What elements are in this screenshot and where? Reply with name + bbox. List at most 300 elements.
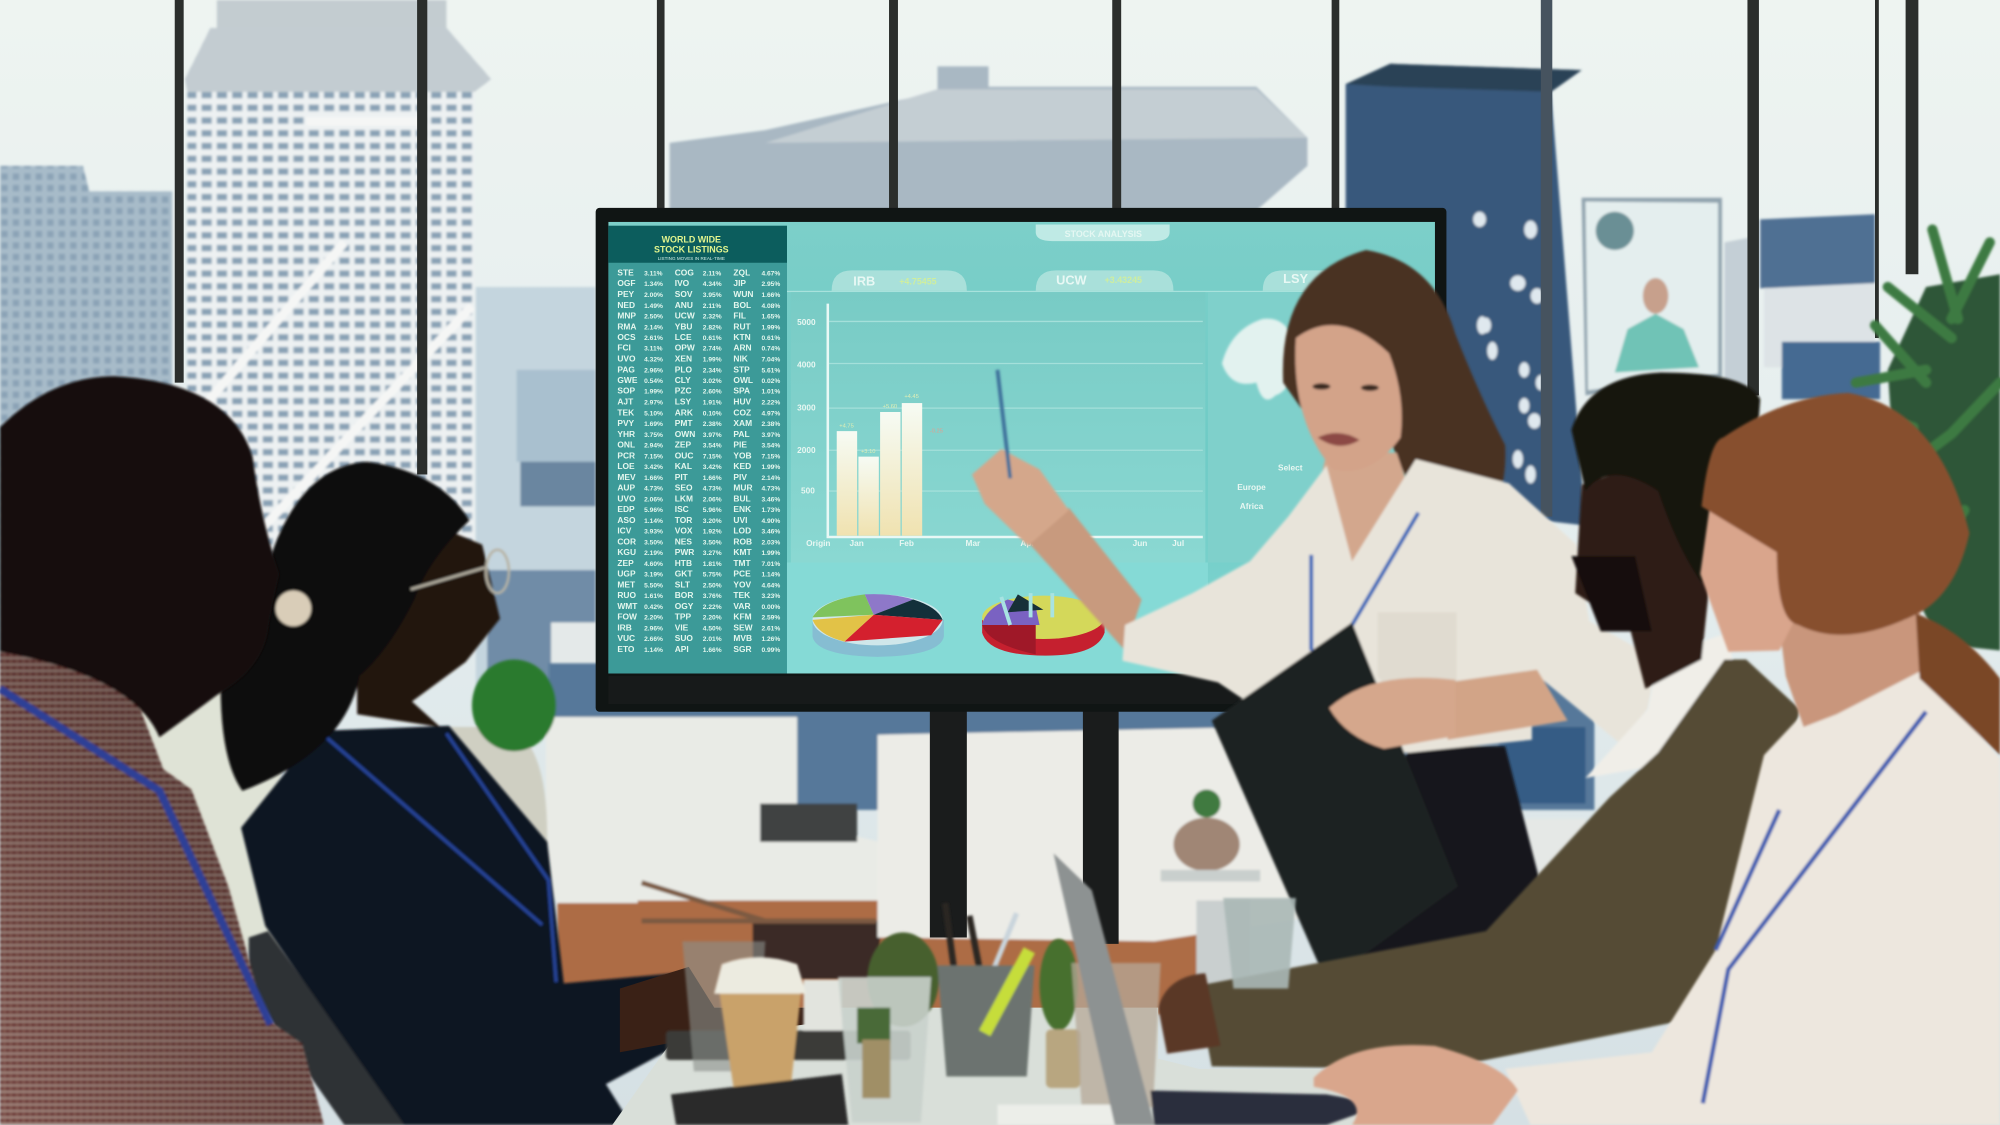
table rows: 2.38% [703, 421, 722, 428]
table rows: ARK [675, 407, 693, 417]
stock table panel [608, 226, 787, 673]
table rows: OGF [617, 278, 636, 288]
ticker tab: IRB [832, 270, 967, 291]
man on left [0, 376, 324, 1125]
table rows: 1.65% [761, 313, 780, 320]
table rows: 2.22% [703, 604, 722, 611]
table rows: 5.75% [703, 572, 722, 579]
dark rug [753, 921, 880, 980]
blue building lower [1782, 342, 1880, 399]
table rows: UVI [733, 515, 747, 525]
world map [1222, 319, 1294, 400]
table subtitle: LISTING MOVES IN REAL-TIME [658, 256, 725, 261]
chart axes [828, 304, 1203, 537]
table rows: 2.96% [644, 367, 663, 374]
x-axis labels: Jan [849, 538, 864, 548]
table rows: 1.73% [761, 507, 780, 514]
x-axis labels: Jun [1133, 538, 1147, 548]
potted plant on side table [1161, 790, 1260, 990]
building right of tower [476, 287, 596, 708]
wall display [596, 208, 1446, 712]
wooden sofa table frame [642, 883, 876, 921]
table rows: 1.99% [703, 356, 722, 363]
table rows: LOE [617, 461, 635, 471]
table rows: 1.26% [761, 636, 780, 643]
table rows: ASO [617, 515, 636, 525]
presenter face [1295, 325, 1402, 471]
left low-rise building [0, 166, 172, 663]
presenter neck [1314, 453, 1416, 574]
table rows: ENK [733, 504, 751, 514]
table rows: 3.02% [703, 378, 722, 385]
table rows: UVO [617, 353, 636, 363]
table rows: 3.46% [761, 496, 780, 503]
table rows: 4.64% [761, 582, 780, 589]
table rows: 1.91% [703, 400, 722, 407]
presenter pointing forearm [1028, 508, 1142, 651]
plaid shirt [0, 652, 324, 1125]
table rows: LKM [675, 493, 693, 503]
table rows: FCI [617, 343, 631, 353]
table rows: 3.23% [761, 593, 780, 600]
table rows: LOD [733, 526, 751, 536]
map panel: Africa [1240, 501, 1264, 511]
table rows: 3.42% [703, 464, 722, 471]
white sofa right [878, 727, 1301, 941]
central roof band [765, 89, 1307, 143]
table rows: 1.66% [644, 475, 663, 482]
table rows: RMA [617, 321, 637, 331]
table rows: ONL [617, 440, 635, 450]
table rows: VUC [617, 633, 635, 643]
table rows: 2.61% [761, 625, 780, 632]
top tab: stock analysis: STOCK ANALYSIS [1065, 229, 1142, 239]
table rows: 1.01% [761, 389, 780, 396]
table rows: YHR [617, 429, 635, 439]
navy top [241, 726, 689, 1125]
table rows: SEW [733, 622, 753, 632]
table rows: OUC [675, 450, 693, 460]
table rows: 2.14% [644, 324, 663, 331]
table rows: AUP [617, 483, 635, 493]
hair flower [276, 591, 311, 626]
pie chart one [812, 594, 944, 657]
table rows: SOP [617, 386, 635, 396]
map panel: Select [1278, 463, 1303, 473]
bezel lower brand strip [608, 676, 1435, 704]
table rows: 4.97% [761, 410, 780, 417]
billboard [1582, 198, 1722, 395]
table rows: FOW [617, 612, 637, 622]
left white tower [185, 0, 491, 561]
table rows: 3.50% [703, 539, 722, 546]
small plant left [867, 932, 939, 1027]
table rows: 2.34% [703, 367, 722, 374]
blue lanyard [0, 689, 270, 1024]
table rows: 2.01% [703, 636, 722, 643]
table rows: RUT [733, 321, 752, 331]
table rows: 1.99% [761, 464, 780, 471]
plant leaves [1849, 230, 2000, 574]
table rows: PIE [733, 440, 747, 450]
table rows: SLT [675, 579, 691, 589]
table rows: 2.32% [703, 313, 722, 320]
table rows: SEO [675, 483, 693, 493]
coffee cup [714, 957, 806, 1087]
table title line two: STOCK LISTINGS [654, 245, 729, 255]
table rows: ZQL [733, 268, 750, 278]
table rows: 2.06% [644, 496, 663, 503]
ticker tab: LSY: LSY [1283, 271, 1308, 286]
screen background [608, 222, 1435, 673]
ticker tab: IRB: IRB [853, 274, 875, 289]
white cabinet [1524, 819, 1585, 875]
white sofa left [546, 717, 880, 903]
table rows: 3.11% [644, 346, 663, 353]
table rows: 3.76% [703, 593, 722, 600]
table rows: OPW [675, 343, 695, 353]
table rows: 5.61% [761, 367, 780, 374]
table rows: 2.74% [703, 346, 722, 353]
green shrub [472, 659, 556, 751]
table rows: 4.34% [703, 281, 722, 288]
table rows: 7.01% [761, 561, 780, 568]
table rows: KTN [733, 332, 751, 342]
table rows: 3.54% [761, 443, 780, 450]
table rows: FIL [733, 310, 746, 320]
table rows: 0.74% [761, 346, 780, 353]
table rows: 5.96% [703, 507, 722, 514]
table rows: 2.66% [644, 636, 663, 643]
pie panel band [787, 562, 1208, 673]
presenter white shirt [1122, 459, 1657, 755]
right dark tower [1346, 64, 1585, 526]
bar value labels: +4.45 [904, 394, 919, 400]
table rows: LSY [675, 397, 691, 407]
table rows: KFM [733, 612, 752, 622]
table rows: 1.61% [644, 593, 663, 600]
table rows: 3.97% [761, 432, 780, 439]
presenter skirt [1327, 746, 1540, 995]
water glass left [682, 941, 765, 1071]
table rows: 3.93% [644, 529, 663, 536]
table rows [617, 268, 780, 654]
table rows: UGP [617, 569, 636, 579]
chart gridlines [829, 321, 1203, 491]
table rows: JIP [733, 278, 746, 288]
her auburn hair [1702, 393, 1969, 635]
table rows: BOR [675, 590, 693, 600]
dark band [520, 462, 596, 506]
x-axis labels: Jul [1172, 538, 1184, 548]
water glass far [1223, 898, 1296, 989]
table rows: ISC [675, 504, 689, 514]
y-axis labels: 3000 [797, 403, 816, 413]
skyline buildings [0, 0, 1880, 712]
table rows: 0.61% [761, 335, 780, 342]
display bezel [596, 208, 1446, 712]
table rows: ICV [617, 526, 632, 536]
bar chart panel [791, 292, 1205, 562]
bar value labels: +4.75 [839, 423, 854, 429]
table rows: 1.49% [644, 303, 663, 310]
table rows: 0.99% [761, 647, 780, 654]
table rows: NIK [733, 353, 748, 363]
table rows: AJT [617, 397, 634, 407]
reflected panel [517, 370, 596, 462]
table rows: VIE [675, 622, 689, 632]
table rows: 3.20% [703, 518, 722, 525]
table rows: MVB [733, 633, 752, 643]
table rows: 2.11% [703, 271, 721, 278]
table rows: OWN [675, 429, 695, 439]
table rows: 0.61% [703, 335, 722, 342]
white roof building [1764, 283, 1875, 367]
table rows: 7.15% [644, 453, 663, 460]
table rows: TEK [617, 407, 634, 417]
table rows: 7.04% [761, 356, 780, 363]
table rows: 1.66% [703, 647, 722, 654]
table rows: MEV [617, 472, 636, 482]
table rows: API [675, 644, 689, 654]
table rows: 1.66% [703, 475, 722, 482]
notebook [666, 1031, 911, 1060]
table rows: SGR [733, 644, 752, 654]
table rows: WMT [617, 601, 638, 611]
table rows: KMT [733, 547, 752, 557]
table rows: STP [733, 364, 750, 374]
table rows: 1.66% [761, 292, 780, 299]
table rows: ZEP [617, 558, 634, 568]
table rows: ARN [733, 343, 752, 353]
her face [1700, 491, 1805, 652]
table objects [666, 853, 1384, 1125]
man beard [1571, 556, 1652, 631]
man face and neck [1575, 459, 1709, 689]
table rows: 2.94% [644, 443, 663, 450]
shirt pocket [1378, 612, 1457, 714]
table rows: 1.99% [761, 550, 780, 557]
table rows: ZEP [675, 440, 691, 450]
table rows: 7.15% [703, 453, 722, 460]
x-axis labels: Origin [806, 538, 831, 548]
table rows: CLY [675, 375, 691, 385]
table rows: GKT [675, 569, 693, 579]
table rows: PEY [617, 289, 635, 299]
table rows: 1.99% [761, 324, 780, 331]
table rows: 2.50% [703, 582, 722, 589]
table rows: XEN [675, 353, 692, 363]
water glass centre [838, 977, 931, 1122]
striped lower facade [487, 570, 596, 704]
table rows: 4.73% [703, 486, 722, 493]
table rows: YOB [733, 450, 752, 460]
y-axis labels [797, 317, 816, 496]
region labels: Europe [1237, 482, 1266, 492]
white chair [449, 727, 547, 867]
table rows: 2.00% [644, 292, 663, 299]
glasses [411, 568, 485, 589]
table rows: ROB [733, 536, 752, 546]
table rows: 3.75% [644, 432, 663, 439]
table rows: OCS [617, 332, 636, 342]
light panel between sitters [140, 682, 281, 950]
central low building [670, 66, 1307, 210]
table rows: 1.81% [703, 561, 722, 568]
ticker tab: UCW: UCW [1056, 272, 1088, 287]
her lanyard [1703, 712, 1926, 1103]
table rows: 1.14% [761, 572, 780, 579]
room interior behind the display [140, 659, 1594, 1014]
table rows: TMT [733, 558, 752, 568]
table title: WORLD WIDE [662, 234, 721, 244]
table rows: OGY [675, 601, 694, 611]
table rows: 3.19% [644, 572, 663, 579]
y-axis labels: 5000 [797, 317, 816, 327]
frame mullion in front of dark tower [1541, 0, 1552, 517]
table rows: ETO [617, 644, 635, 654]
presenter hair [1283, 250, 1505, 529]
man white collar [1585, 633, 1735, 778]
table rows: 2.22% [761, 400, 780, 407]
man hand [1158, 973, 1221, 1054]
table rows: HUV [733, 397, 752, 407]
glasses lens [486, 550, 509, 593]
clipboard [1212, 622, 1458, 982]
table rows: 1.14% [644, 518, 663, 525]
x-axis labels: Feb [899, 538, 914, 548]
table rows: SUO [675, 633, 693, 643]
table rows: 3.97% [703, 432, 722, 439]
her neck [1779, 606, 1923, 727]
table rows: VOX [675, 526, 693, 536]
table rows: 4.67% [761, 271, 780, 278]
ticker tab: LSY [1263, 270, 1327, 291]
table rows: XAM [733, 418, 752, 428]
table rows: 2.06% [703, 496, 722, 503]
display stand [930, 702, 1119, 944]
ticker tab: UCW: +3.43245 [1105, 275, 1142, 285]
ticker tab: UCW [1036, 270, 1173, 291]
braided hair [221, 462, 469, 791]
bar value labels: +5.60 [883, 404, 897, 410]
her hands [1314, 1045, 1518, 1125]
lanyard [319, 731, 556, 982]
water glass right [1071, 963, 1161, 1107]
table rows: 2.61% [644, 335, 663, 342]
table rows: 2.14% [761, 475, 780, 482]
table rows: BUL [733, 493, 751, 503]
woman on right [1314, 393, 2000, 1125]
table rows: PCR [617, 450, 635, 460]
man on right [1158, 372, 1800, 1069]
table rows: 4.50% [703, 625, 722, 632]
table rows: EDP [617, 504, 635, 514]
table rows: STE [617, 268, 634, 278]
table rows: SOV [675, 289, 693, 299]
table rows: PIV [733, 472, 747, 482]
paper with eyeglasses [997, 1105, 1115, 1125]
floor [557, 893, 1208, 1014]
table rows: RUO [617, 590, 636, 600]
woman's hand on table [620, 967, 824, 1052]
table rows: SPA [733, 386, 750, 396]
blue lower wall [548, 663, 1594, 810]
table header [608, 226, 787, 263]
table rows: 1.69% [644, 421, 663, 428]
table rows: OWL [733, 375, 753, 385]
x-axis labels: Apr [1020, 538, 1035, 548]
blue panel behind presenter [1499, 727, 1585, 804]
table rows: MUR [733, 483, 753, 493]
table rows: PCE [733, 569, 751, 579]
table rows: 5.96% [644, 507, 663, 514]
table rows: LCE [675, 332, 692, 342]
ponytail [1916, 614, 2000, 755]
table rows: NES [675, 536, 692, 546]
table rows: TOR [675, 515, 692, 525]
table rows: 2.03% [761, 539, 780, 546]
table rows: 4.73% [761, 486, 780, 493]
right far buildings [1724, 237, 1751, 395]
table rows: BOL [733, 300, 751, 310]
ticker tab: IRB: +4.75455 [899, 276, 937, 286]
table rows: COG [675, 268, 694, 278]
table rows: 2.96% [644, 625, 663, 632]
table rows: HTB [675, 558, 692, 568]
table rows: 3.95% [703, 292, 722, 299]
white paper pad [804, 980, 842, 1036]
table rows: PAG [617, 364, 635, 374]
table rows: MNP [617, 310, 636, 320]
table rows: ANU [675, 300, 693, 310]
presenter [972, 250, 1657, 995]
table rows: PWR [675, 547, 694, 557]
table rows: PLO [675, 364, 692, 374]
table rows: YOV [733, 579, 752, 589]
table rows: 3.42% [644, 464, 663, 471]
table rows: 2.20% [644, 615, 663, 622]
presenter eyes and mouth [1312, 383, 1379, 446]
table rows: 2.97% [644, 400, 663, 407]
chair back [249, 931, 408, 1125]
table rows: 4.32% [644, 356, 663, 363]
table rows: COZ [733, 407, 751, 417]
her white shirt [1505, 667, 2000, 1125]
table rows: KGU [617, 547, 636, 557]
table rows: KAL [675, 461, 692, 471]
man hair [1571, 372, 1760, 583]
table rows: 1.92% [703, 529, 722, 536]
bars [837, 403, 922, 536]
y-axis labels: 500 [801, 486, 815, 496]
window frames [175, 0, 1918, 474]
table rows: PAL [733, 429, 750, 439]
table rows: UCW [675, 310, 695, 320]
white stack [551, 622, 596, 712]
man head silhouette [0, 376, 279, 737]
table rows: 0.10% [703, 410, 722, 417]
plant dark core [1888, 274, 2000, 651]
x-axis labels: Mar [966, 538, 981, 548]
table rows: YBU [675, 321, 692, 331]
table rows: 2.82% [703, 324, 722, 331]
pencil holder [938, 903, 1034, 1077]
table rows: 7.15% [761, 453, 780, 460]
calculator [671, 1074, 848, 1125]
y-axis labels: 4000 [797, 359, 816, 369]
table rows: 2.11% [703, 303, 721, 310]
